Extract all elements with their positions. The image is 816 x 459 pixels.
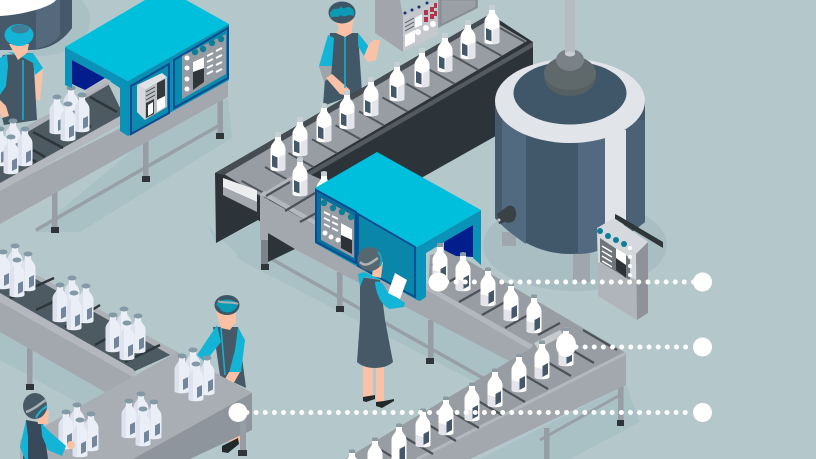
machine: gray top — [375, 0, 478, 52]
bottle cluster 6 — [174, 348, 214, 401]
top-left tank — [0, 0, 90, 56]
conveyor: centre to bottom line — [260, 170, 626, 459]
person: woman with clipboard — [357, 247, 407, 408]
person: lower-left operator — [20, 393, 75, 459]
machine: blue centre — [315, 152, 481, 301]
belt — [0, 81, 125, 185]
stripes — [266, 182, 617, 459]
bottle cropped at bottom edge — [392, 423, 406, 459]
control panel right — [597, 214, 663, 320]
bottle cluster 8 — [58, 402, 98, 457]
bottle cluster 5 — [106, 306, 146, 360]
bottles on centre line — [347, 243, 574, 459]
bottles on dark line — [270, 5, 500, 171]
person: top-left operator — [0, 24, 43, 125]
conveyor: top-left — [0, 78, 228, 233]
bottle cluster 4 — [52, 276, 94, 330]
legs and crossbar — [36, 95, 224, 233]
bottle top at bottom edge — [347, 449, 357, 459]
tank valve — [497, 206, 516, 224]
bottles behind centre machine — [292, 157, 332, 210]
callout line 1 — [428, 272, 712, 292]
person: operator at table — [197, 295, 246, 453]
machine: blue top-left — [65, 0, 229, 136]
tank — [483, 0, 667, 291]
table — [20, 352, 252, 459]
conveyor: dark back line — [215, 14, 533, 248]
callout line 2 — [556, 333, 712, 357]
blue panel frames — [131, 64, 169, 134]
legs — [261, 230, 624, 459]
side — [0, 78, 228, 224]
bottle cluster 3 — [0, 244, 36, 297]
floor shadows — [0, 98, 640, 459]
callout line 3 — [228, 403, 712, 422]
person: operator behind dark conveyor — [319, 2, 380, 106]
display box — [137, 73, 167, 90]
control plate — [182, 34, 226, 99]
bottle cluster 1 — [50, 86, 90, 141]
conveyor: lower-left — [0, 257, 177, 425]
roller at turn — [534, 330, 564, 349]
bottle cluster 2 — [0, 118, 32, 174]
bottle cluster 7 — [122, 392, 162, 446]
tank legs — [502, 232, 590, 282]
bottle cropped near bottom edge — [368, 437, 382, 459]
